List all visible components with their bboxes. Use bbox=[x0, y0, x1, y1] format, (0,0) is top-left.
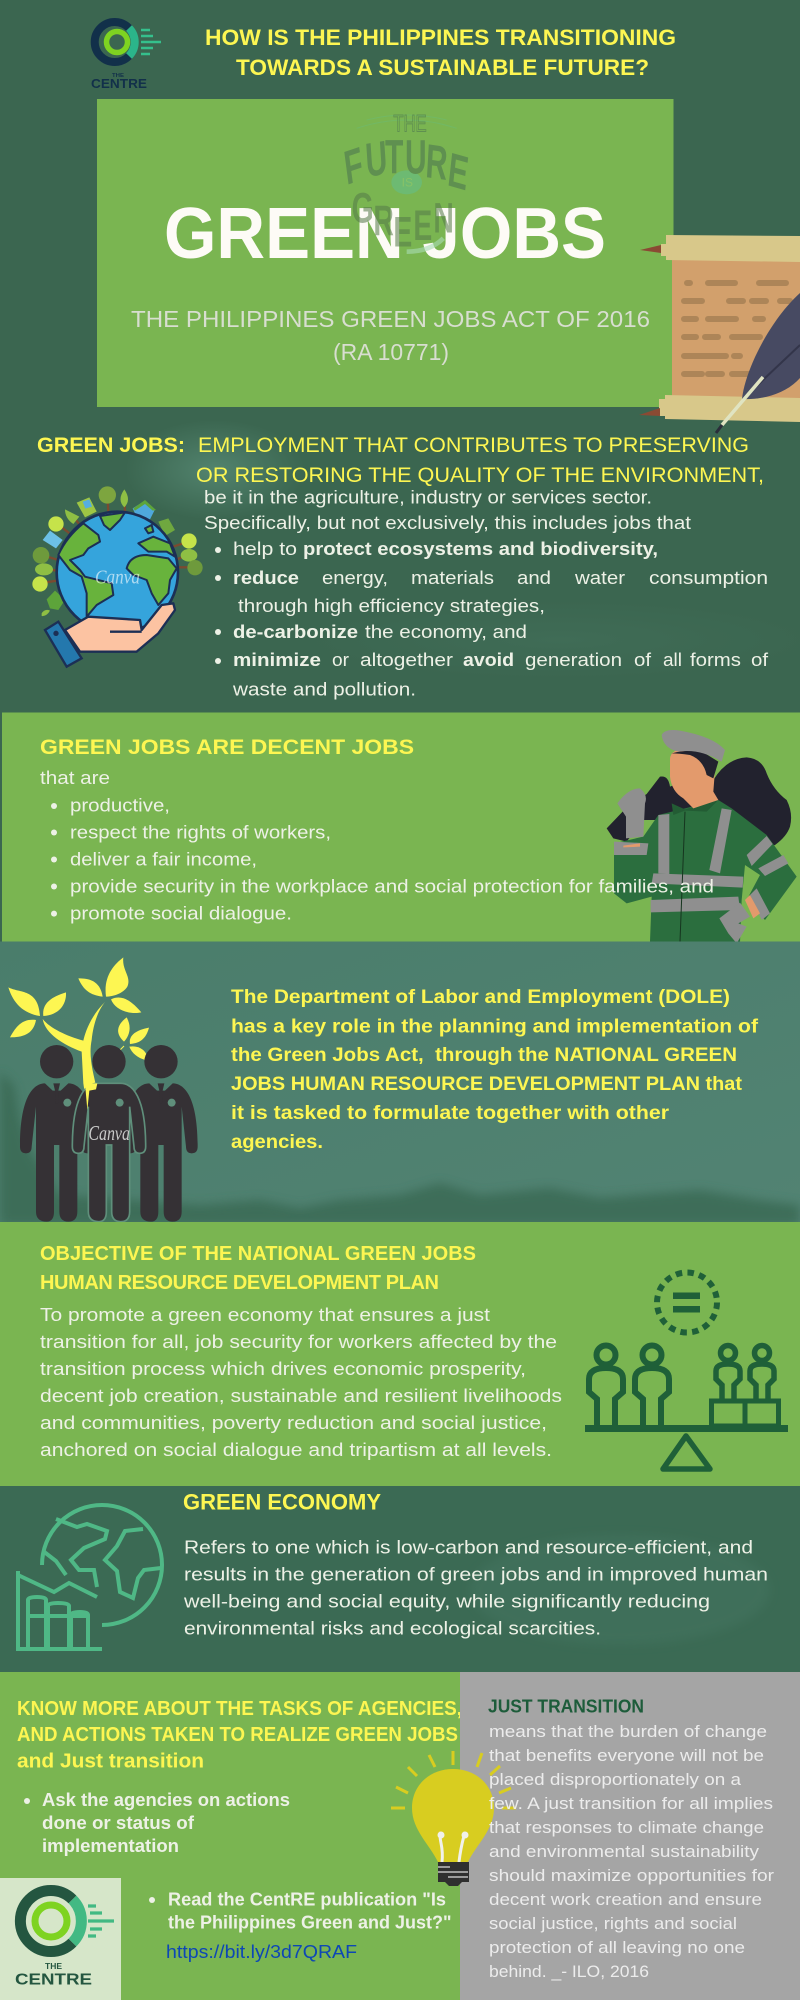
panel: hero bbox=[97, 99, 674, 407]
illustration: the future is green lettering: IS bbox=[402, 176, 413, 190]
text block: just transition: and environmental sustainability bbox=[489, 1842, 760, 1861]
illustration: scroll and quill bbox=[639, 235, 800, 433]
text block: objective: anchored on social dialogue and tripartism at all levels. bbox=[40, 1440, 552, 1460]
list: decent jobs qualities bbox=[40, 768, 714, 924]
panel: know more bbox=[0, 1672, 462, 2000]
text block: objective: and communities, poverty reduction and social justice, bbox=[40, 1413, 547, 1433]
logo: The CentRE: CENTRE bbox=[91, 76, 147, 91]
text block: definition of green jobs: the economy, and bbox=[365, 622, 527, 642]
text block: definition of green jobs: through high efficiency strategies, bbox=[238, 596, 545, 616]
icon: globe held in hand bbox=[32, 486, 203, 667]
logo: The CentRE badge bbox=[0, 1878, 121, 2000]
subtitle: act name: (RA 10771) bbox=[333, 339, 449, 365]
text block: just transition bbox=[489, 1722, 774, 1981]
heading: green jobs definition: EMPLOYMENT THAT CONTRIBUTES TO PRESERVING bbox=[198, 433, 749, 457]
text block: objective: To promote a green economy that ensures a just bbox=[40, 1305, 490, 1325]
logo: The CentRE bbox=[91, 22, 161, 91]
text block: definition of green jobs: minimize bbox=[233, 650, 321, 670]
icon: light bulb bbox=[391, 1751, 516, 1886]
text block: definition of green jobs: all bbox=[663, 650, 682, 670]
text block: definition of green jobs: generation bbox=[525, 650, 622, 670]
list: decent jobs qualities: that are bbox=[40, 768, 110, 788]
heading: decent jobs: GREEN JOBS ARE DECENT JOBS bbox=[40, 735, 414, 759]
list: decent jobs qualities: productive, bbox=[70, 796, 170, 816]
heading: objective bbox=[40, 1243, 476, 1294]
text block: definition of green jobs: be it in the agriculture, industry or services sector. bbox=[204, 488, 652, 508]
list: decent jobs qualities: deliver a fair income, bbox=[70, 850, 257, 870]
text block: DOLE role: JOBS HUMAN RESOURCE DEVELOPMENT PLAN that bbox=[231, 1074, 743, 1095]
illustration: the future is green lettering: GREEN bbox=[352, 184, 454, 256]
list: ask the agencies bbox=[24, 1790, 290, 1856]
text block: definition of green jobs: help to bbox=[233, 539, 297, 559]
text block: definition of green jobs: and bbox=[517, 568, 551, 588]
list: decent jobs qualities: provide security in the workplace and social protection for families, and bbox=[70, 877, 714, 897]
text block: just transition: protection of all leaving no one bbox=[489, 1938, 745, 1957]
list: ask the agencies: done or status of bbox=[42, 1813, 195, 1833]
illustration: worker carrying sack bbox=[607, 730, 797, 943]
text block: definition of green jobs: Specifically, but not exclusively, this includes jobs that bbox=[204, 513, 691, 533]
list: read the publication bbox=[149, 1889, 452, 1932]
panel: role of DOLE bbox=[0, 942, 800, 1232]
text block: just transition: that benefits everyone will not be bbox=[489, 1746, 764, 1765]
text block: green economy: environmental risks and ecological scarcities. bbox=[184, 1618, 601, 1639]
text block: just transition: that responses to climate change bbox=[489, 1818, 764, 1837]
heading: green jobs definition bbox=[37, 433, 764, 487]
panel: objective of the plan bbox=[0, 1222, 800, 1487]
title: HOW IS THE PHILIPPINES TRANSITIONING bbox=[205, 25, 676, 50]
text block: definition of green jobs: forms bbox=[690, 650, 741, 670]
list: read the publication: Read the CentRE publication "Is bbox=[168, 1889, 446, 1909]
heading: green jobs definition: OR RESTORING THE QUALITY OF THE ENVIRONMENT, bbox=[196, 463, 764, 487]
list: ask the agencies: implementation bbox=[42, 1836, 179, 1856]
text block: just transition: should maximize opportunities for bbox=[489, 1866, 774, 1885]
text block: just transition: behind. _- ILO, 2016 bbox=[489, 1962, 649, 1981]
icon: equality scale bbox=[585, 1272, 788, 1469]
list: decent jobs qualities: respect the rights of workers, bbox=[70, 822, 331, 842]
text block: definition of green jobs: water bbox=[574, 568, 625, 588]
text block: definition of green jobs: avoid bbox=[463, 650, 514, 670]
text block: DOLE role bbox=[231, 987, 759, 1153]
panel: decent jobs bbox=[2, 712, 800, 943]
title: TOWARDS A SUSTAINABLE FUTURE? bbox=[236, 55, 649, 80]
title bbox=[205, 25, 676, 80]
text block: objective: decent job creation, sustainable and resilient livelihoods bbox=[40, 1386, 562, 1406]
text block: just transition: means that the burden of change bbox=[489, 1722, 767, 1741]
text block: DOLE role: the Green Jobs Act, through the NATIONAL GREEN bbox=[231, 1045, 737, 1066]
heading: know more: AND ACTIONS TAKEN TO REALIZE GREEN JOBS bbox=[17, 1724, 458, 1746]
subtitle: act name: THE PHILIPPINES GREEN JOBS ACT OF 2016 bbox=[131, 306, 650, 332]
text block: green economy bbox=[183, 1536, 768, 1639]
text block: definition of green jobs: energy, bbox=[322, 568, 388, 588]
text block: DOLE role: agencies. bbox=[231, 1132, 323, 1153]
text block: objective: transition for all, job security for workers affected by the bbox=[40, 1332, 557, 1352]
text block: green economy: Refers to one which is low-carbon and resource-efficient, and bbox=[184, 1536, 753, 1558]
link: publication: https://bit.ly/3d7QRAF bbox=[166, 1942, 357, 1962]
illustration: three people with plant bbox=[8, 957, 198, 1222]
heading: objective: OBJECTIVE OF THE NATIONAL GREEN JOBS bbox=[40, 1243, 476, 1265]
list: decent jobs qualities: promote social dialogue. bbox=[70, 904, 292, 924]
text block: definition of green jobs: de-carbonize bbox=[233, 622, 358, 642]
list: read the publication: the Philippines Green and Just?" bbox=[168, 1912, 452, 1932]
heading: Green Jobs: GREEN JOBS bbox=[164, 194, 606, 274]
heading: know more: and Just transition bbox=[17, 1750, 204, 1772]
text block: definition of green jobs: protect ecosystems and biodiversity, bbox=[303, 539, 658, 559]
text block: DOLE role: The Department of Labor and Employment (DOLE) bbox=[231, 987, 730, 1008]
logo: The CentRE: THE bbox=[112, 73, 125, 79]
text block: definition of green jobs: consumption bbox=[649, 568, 768, 588]
text block: definition of green jobs: altogether bbox=[360, 650, 453, 670]
text block: green economy: results in the generation of green jobs and in improved human bbox=[184, 1564, 768, 1584]
logo: The CentRE badge: THE bbox=[45, 1962, 63, 1971]
text block: green economy: well-being and social equity, while significantly reducing bbox=[183, 1591, 710, 1612]
text block: definition of green jobs: waste and pollution. bbox=[232, 680, 416, 700]
text block: objective: transition process which drives economic prosperity, bbox=[40, 1359, 526, 1379]
text block: DOLE role: has a key role in the planning and implementation of bbox=[231, 1016, 759, 1038]
text block: definition of green jobs: of bbox=[751, 650, 769, 670]
heading: know more: KNOW MORE ABOUT THE TASKS OF AGENCIES, bbox=[17, 1698, 462, 1720]
text block: definition of green jobs: materials bbox=[411, 568, 494, 588]
icon: globe and chart bbox=[18, 1505, 162, 1649]
text block: definition of green jobs: or bbox=[332, 650, 349, 670]
text block: definition of green jobs bbox=[204, 488, 769, 700]
heading: know more bbox=[17, 1698, 462, 1772]
panel: just transition bbox=[391, 1672, 800, 2000]
text block: objective bbox=[40, 1305, 562, 1460]
heading: objective: HUMAN RESOURCE DEVELOPMENT PLAN bbox=[40, 1272, 439, 1294]
heading: just transition: JUST TRANSITION bbox=[488, 1696, 644, 1716]
text block: just transition: decent work creation and ensure bbox=[489, 1890, 762, 1909]
text block: definition of green jobs: of bbox=[634, 650, 652, 670]
heading: green jobs definition: GREEN JOBS: bbox=[37, 433, 185, 457]
text block: DOLE role: it is tasked to formulate together with other bbox=[231, 1103, 670, 1124]
list: ask the agencies: Ask the agencies on actions bbox=[42, 1790, 290, 1810]
illustration: the future is green lettering: THE bbox=[393, 111, 427, 138]
illustration: the future is green lettering: FUTURE bbox=[341, 131, 471, 201]
heading: green economy: GREEN ECONOMY bbox=[183, 1490, 381, 1515]
text block: just transition: few. A just transition for all implies bbox=[489, 1794, 773, 1813]
panel: green economy bbox=[0, 1486, 800, 1672]
text block: definition of green jobs: reduce bbox=[233, 568, 299, 588]
icon: globe held in hand: Canva bbox=[95, 566, 140, 588]
illustration: three people with plant: Canva bbox=[88, 1123, 130, 1145]
text block: just transition: placed disproportionately on a bbox=[489, 1770, 742, 1789]
text block: just transition: social justice, rights and social bbox=[489, 1914, 737, 1933]
illustration: the future is green lettering bbox=[341, 111, 471, 256]
subtitle: act name bbox=[131, 306, 650, 365]
logo: The CentRE badge: CENTRE bbox=[15, 1972, 92, 1988]
